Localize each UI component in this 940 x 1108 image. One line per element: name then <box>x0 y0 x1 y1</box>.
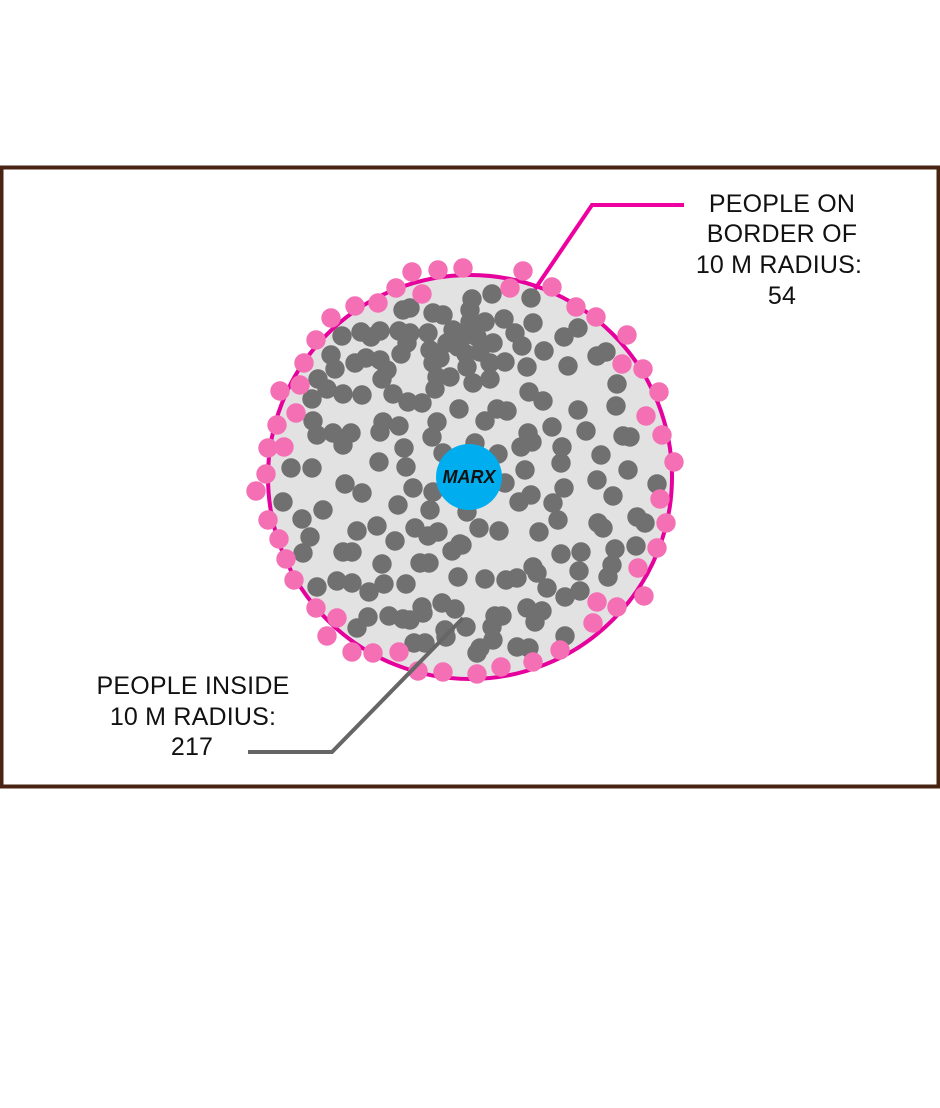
center marker: Marx: MARX <box>442 467 496 487</box>
callout: people inside: 10 M RADIUS: <box>110 703 276 731</box>
callout: people inside <box>97 672 289 761</box>
callout: people inside: 217 <box>171 733 213 761</box>
callout: people on border <box>696 190 862 310</box>
callout: people on border: 54 <box>768 282 796 310</box>
arrow: inside callout line <box>248 618 463 752</box>
callout: people on border: BORDER OF <box>707 220 857 248</box>
people inside radius: gray dots <box>273 284 667 663</box>
center marker: Marx <box>436 444 502 510</box>
radius circle <box>268 275 672 679</box>
people on border: pink dots <box>246 258 684 684</box>
callout: people inside: PEOPLE INSIDE <box>97 672 289 700</box>
panel: brown frame <box>2 168 938 786</box>
callout: people on border: PEOPLE ON <box>709 190 855 218</box>
callout: people on border: 10 M RADIUS: <box>696 251 862 279</box>
arrow: border callout line <box>535 205 684 289</box>
